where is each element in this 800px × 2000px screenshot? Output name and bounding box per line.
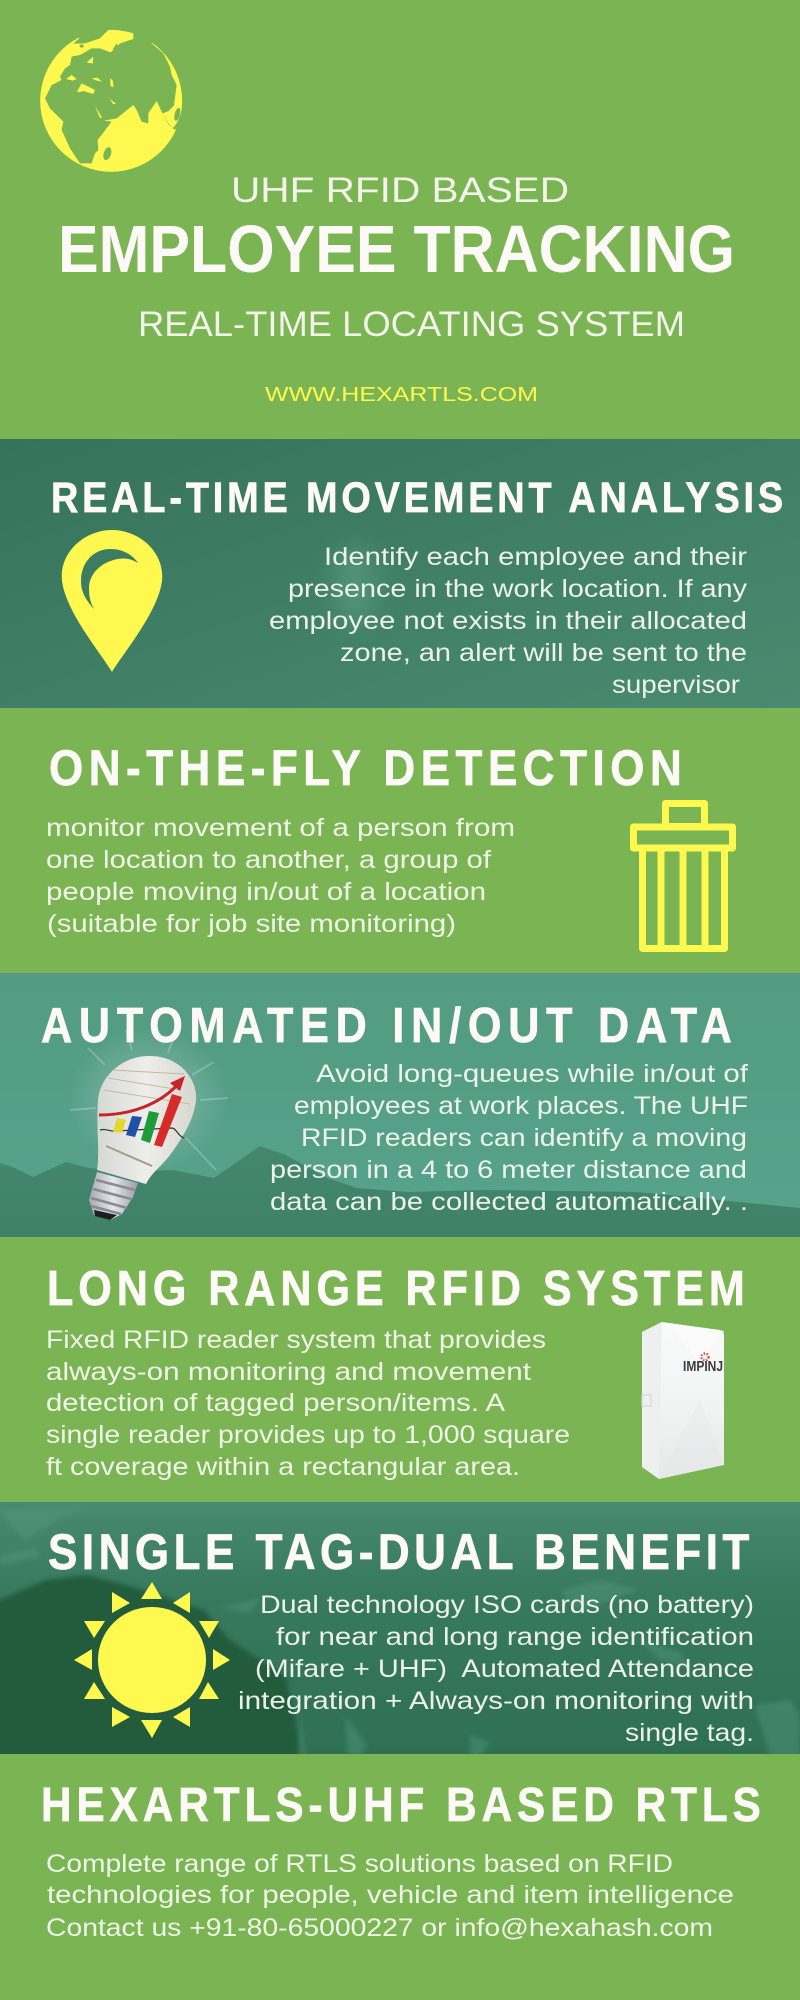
body text and contact: Contact us +91-80-65000227 or info@hexahash.com [46, 1914, 713, 1942]
body text and contact: Complete range of RTLS solutions based on RFID [46, 1850, 673, 1878]
panel: long range RFID system [0, 1237, 800, 1502]
body text: monitor movement of a person from [46, 814, 515, 842]
body text [270, 1060, 748, 1216]
heading: LONG RANGE RFID SYSTEM [47, 1260, 745, 1316]
panel: header [0, 0, 800, 439]
body text: zone, an alert will be sent to the [340, 639, 747, 667]
icon: globe [40, 22, 187, 172]
panel: on-the-fly detection [0, 708, 800, 973]
heading: HEXARTLS-UHF BASED RTLS [41, 1777, 761, 1832]
icon: location pin [62, 530, 162, 672]
body text: employee not exists in their allocated [269, 607, 747, 635]
body text and contact [46, 1850, 734, 1942]
body text: data can be collected automatically. . [270, 1188, 748, 1216]
heading: SINGLE TAG-DUAL BENEFIT [48, 1523, 750, 1580]
heading: REAL-TIME MOVEMENT ANALYSIS [51, 473, 783, 522]
subtitle: UHF RFID based: UHF RFID BASED [231, 171, 569, 210]
subtitle: real-time locating system: REAL-TIME LOCATING SYSTEM [138, 305, 685, 344]
body text: RFID readers can identify a moving [301, 1124, 747, 1152]
icon: sun [74, 1582, 230, 1738]
heading: AUTOMATED IN/OUT DATA [41, 997, 732, 1053]
body text [46, 1326, 570, 1481]
body text: integration + Always-on monitoring with [238, 1687, 754, 1715]
website link: WWW.HEXARTLS.COM [265, 384, 538, 406]
icon: Impinj RFID reader [642, 1322, 724, 1479]
body text: single reader provides up to 1,000 square [46, 1421, 570, 1449]
panel: HexaRTLS UHF based RTLS [0, 1754, 800, 2000]
body text [46, 814, 515, 938]
title: employee tracking: EMPLOYEE TRACKING [58, 212, 735, 287]
body text: Identify each employee and their [324, 543, 747, 571]
panel: real-time movement analysis [0, 439, 800, 708]
body text [238, 1591, 754, 1747]
body text: supervisor [612, 671, 740, 699]
body text: ft coverage within a rectangular area. [46, 1453, 520, 1481]
body text: people moving in/out of a location [46, 878, 486, 906]
body text: one location to another, a group of [46, 846, 491, 874]
body text: employees at work places. The UHF [294, 1092, 748, 1120]
body text: always-on monitoring and movement [46, 1358, 531, 1386]
body text [269, 543, 748, 699]
panel: single tag-dual benefit [0, 1502, 800, 1770]
body text: person in a 4 to 6 meter distance and [270, 1156, 747, 1184]
body text: single tag. [625, 1719, 754, 1747]
icon: light bulb with bar chart [68, 1028, 228, 1220]
logo text: IMPINJ [683, 1358, 723, 1375]
body text: Avoid long-queues while in/out of [316, 1060, 748, 1088]
panel: automated in/out data [0, 973, 800, 1237]
icon: trash can [634, 804, 732, 948]
body text: (suitable for job site monitoring) [47, 910, 456, 938]
body text and contact: technologies for people, vehicle and item intelligence [47, 1881, 734, 1909]
body text: Fixed RFID reader system that provides [46, 1326, 546, 1354]
heading: ON-THE-FLY DETECTION [49, 739, 682, 796]
body text: detection of tagged person/items. A [46, 1389, 505, 1417]
body text: Dual technology ISO cards (no battery) [260, 1591, 754, 1619]
body text: for near and long range identification [276, 1623, 754, 1651]
body text: presence in the work location. If any [288, 575, 748, 603]
body text: (Mifare + UHF) Automated Attendance [255, 1655, 754, 1683]
